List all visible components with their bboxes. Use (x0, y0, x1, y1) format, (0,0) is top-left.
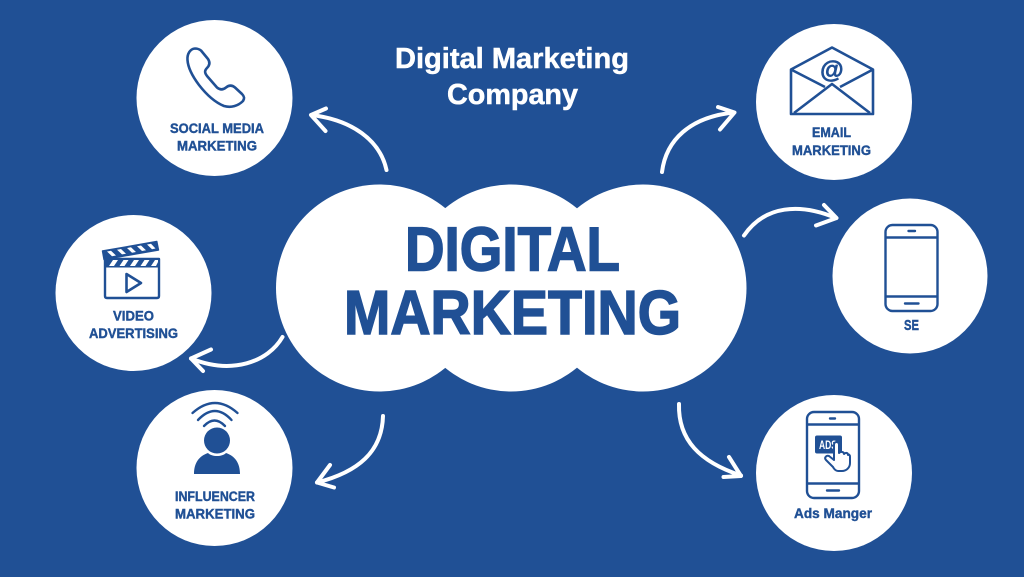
icon: phone (187, 48, 244, 107)
icon: phone with ads button and pointer (807, 412, 859, 498)
icon: open envelope with at sign: @ (820, 57, 843, 84)
central cloud: digital marketing: MARKETING (344, 279, 681, 348)
label: social media marketing: MARKETING (177, 138, 257, 154)
label: influencer marketing: INFLUENCER (175, 489, 255, 504)
label: influencer marketing: MARKETING (175, 506, 255, 522)
label: email marketing: MARKETING (792, 143, 871, 158)
panel: email marketing (756, 24, 912, 180)
icon: person with signal waves (192, 403, 240, 474)
panel: SE (832, 198, 988, 354)
label: email marketing: EMAIL (812, 125, 851, 140)
panel: ads manager (756, 395, 912, 551)
arrow: to email marketing (662, 107, 734, 172)
arrow: to SE (744, 205, 836, 236)
panel: video advertising (56, 215, 212, 371)
label: ads manger: Ads Manger (794, 505, 873, 521)
arrow: to video advertising (191, 337, 282, 371)
icon: open envelope with at sign (791, 48, 873, 114)
title: Company (447, 79, 578, 111)
panel: influencer marketing (136, 390, 292, 546)
title (395, 43, 629, 111)
label: SE: SE (904, 318, 919, 334)
panel: social media marketing (136, 20, 292, 176)
title: Digital Marketing (395, 43, 629, 75)
label: video advertising: VIDEO (113, 308, 154, 324)
icon: phone with ads button and pointer: ADS (819, 438, 837, 452)
arrow: to ads manager (679, 404, 741, 477)
central cloud: digital marketing (276, 184, 746, 392)
central cloud: digital marketing: DIGITAL (405, 216, 620, 284)
icon: smartphone (886, 225, 938, 311)
arrow: to social media marketing (311, 108, 386, 170)
icon: clapperboard (102, 242, 160, 298)
arrow: to influencer marketing (317, 416, 383, 488)
label: video advertising: ADVERTISING (89, 326, 178, 341)
label: social media marketing: SOCIAL MEDIA (170, 121, 264, 136)
